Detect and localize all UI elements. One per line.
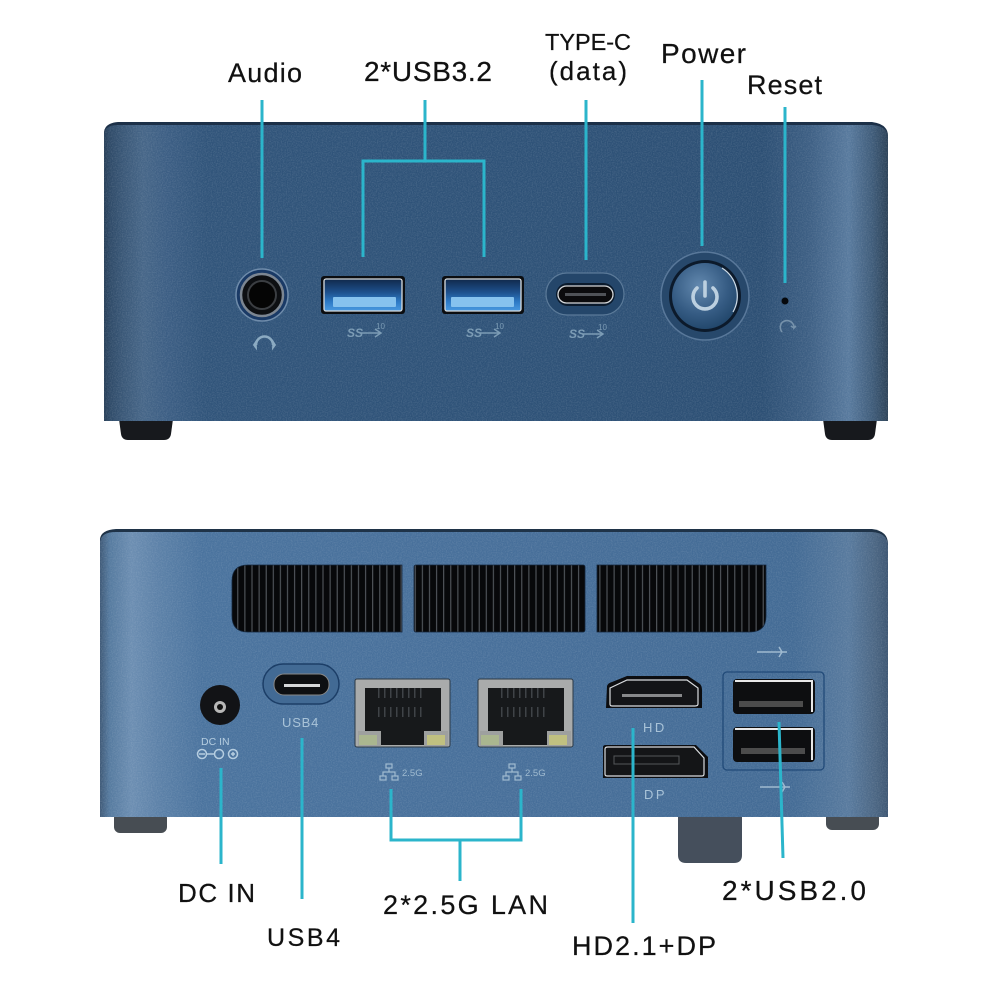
DC IN label: DC IN (201, 736, 230, 748)
reset hole (782, 298, 788, 304)
SS10 logos: 10 (598, 323, 607, 332)
DC IN label (198, 736, 238, 758)
LAN speed text (402, 768, 546, 779)
SS10 logos: SS (569, 327, 585, 341)
LAN port 2 (478, 679, 573, 747)
SS10 logos: 10 (495, 322, 504, 331)
USB4 port (263, 664, 339, 704)
vents (232, 565, 766, 632)
USB 3.2 port 2 (442, 276, 524, 314)
front device feet (119, 419, 877, 440)
USB symbols (757, 647, 790, 792)
label: 2*2.5G LAN: 2*2.5G LAN (383, 890, 548, 920)
label: HD2.1+DP: HD2.1+DP (572, 931, 716, 961)
label: (data): (data) (549, 56, 627, 86)
Type-C port (546, 273, 624, 315)
DP text: DP (644, 787, 667, 802)
DC in jack (200, 685, 240, 725)
callout lines (221, 80, 785, 923)
label: TYPE-C: TYPE-C (545, 29, 631, 55)
label: USB4: USB4 (267, 924, 340, 952)
top device: front panel (100, 120, 892, 440)
SS10 logos: 10 (376, 322, 385, 331)
USB4 text: USB4 (282, 715, 319, 730)
label: 2*USB2.0: 2*USB2.0 (722, 875, 866, 906)
USB 2.0 frame (723, 672, 824, 770)
label: 2*USB3.2: 2*USB3.2 (364, 56, 492, 87)
SS10 logos: SS (347, 326, 363, 340)
audio jack (236, 269, 288, 321)
rear device body (96, 528, 892, 818)
label: Audio: Audio (228, 58, 302, 88)
icon: reset (780, 321, 796, 332)
USB 2.0 port bottom (733, 727, 815, 762)
HD text: HD (643, 720, 667, 735)
rear feet (114, 812, 879, 833)
USB 3.2 port 1 (321, 276, 405, 314)
LAN speed text: 2.5G (402, 768, 423, 779)
HDMI port (606, 676, 702, 708)
power button (661, 252, 749, 340)
SS10 logos (347, 322, 607, 341)
DisplayPort (603, 745, 708, 778)
label: DC IN: DC IN (178, 878, 255, 908)
label: Reset: Reset (747, 70, 822, 100)
LAN port 1 (355, 679, 450, 747)
icon: headset (254, 336, 276, 349)
bottom device: rear panel (96, 528, 892, 863)
label: Power: Power (661, 38, 746, 69)
stand (678, 812, 742, 863)
SS10 logos: SS (466, 326, 482, 340)
LAN symbols (380, 764, 521, 780)
USB 2.0 port top (733, 679, 815, 714)
LAN speed text: 2.5G (525, 768, 546, 779)
front device body (100, 120, 892, 422)
